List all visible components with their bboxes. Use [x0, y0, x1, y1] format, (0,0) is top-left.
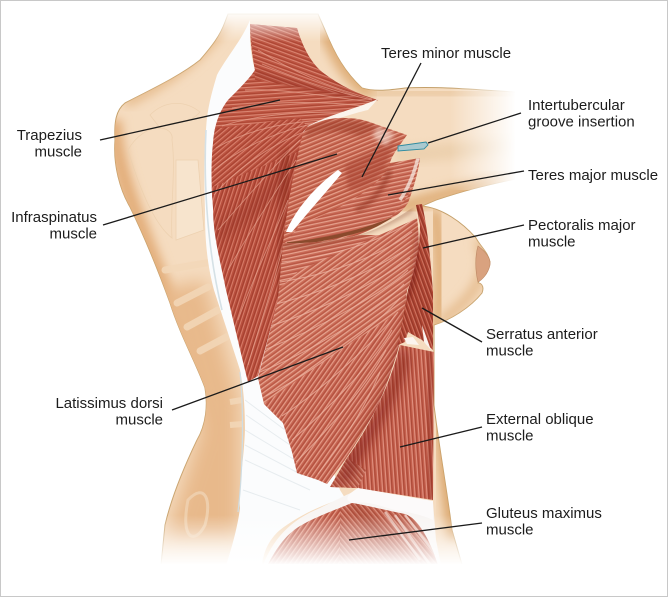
gluteus maximus muscle: [267, 488, 439, 562]
bottom cover: [150, 564, 480, 579]
label: latissimus dorsi muscle: Latissimus dorsi: [55, 395, 163, 412]
label: serratus anterior muscle: muscle: [486, 342, 534, 360]
torso and arm illustration: [114, 10, 535, 580]
label: teres minor muscle: Teres minor muscle: [381, 45, 511, 62]
label: intertubercular groove insertion: groove insertion: [528, 114, 635, 130]
trapezius tendon at acromion: [303, 99, 378, 132]
label: infraspinatus muscle: muscle: [49, 226, 97, 242]
label: gluteus maximus muscle: muscle: [486, 522, 534, 538]
nipple: [476, 246, 490, 282]
bottom fade: [150, 515, 480, 565]
label: intertubercular groove insertion: Intertubercular: [528, 97, 625, 114]
label: gluteus maximus muscle: Gluteus maximus: [486, 505, 602, 522]
label: infraspinatus muscle: Infraspinatus: [11, 209, 97, 226]
serratus anterior muscle: [398, 204, 433, 350]
label: trapezius muscle: Trapezius: [17, 127, 82, 144]
leader lines: [100, 63, 524, 540]
top fade: [195, 10, 355, 42]
label: pectoralis major muscle: muscle: [528, 234, 576, 250]
arm fade cover: [515, 82, 535, 190]
latissimus dorsi muscle: [255, 208, 425, 490]
label: latissimus dorsi muscle: muscle: [115, 412, 163, 428]
label: trapezius muscle: muscle: [34, 144, 82, 160]
serratus tendon slips: [404, 337, 419, 345]
label: external oblique muscle: External oblique: [486, 411, 594, 428]
scapular tendon highlight: [286, 170, 342, 232]
trapezius muscle: [212, 24, 378, 382]
label: pectoralis major muscle: Pectoralis major: [528, 217, 636, 234]
label: teres major muscle: Teres major muscle: [528, 167, 658, 184]
label: external oblique muscle: muscle: [486, 428, 534, 444]
external oblique muscle: [330, 345, 434, 500]
bicipital groove insertion marker: [398, 142, 428, 151]
infraspinatus and teres muscles: [283, 118, 420, 244]
label: serratus anterior muscle: Serratus anterior: [486, 326, 598, 343]
spine and ribs seen through the skin: [128, 103, 243, 536]
arm fade: [450, 82, 516, 190]
iliac crest tendon band: [347, 488, 433, 520]
skin: torso, shoulder, arm and breast: [114, 14, 530, 575]
thoracolumbar fascia and spinal aponeurosis: [204, 20, 345, 568]
